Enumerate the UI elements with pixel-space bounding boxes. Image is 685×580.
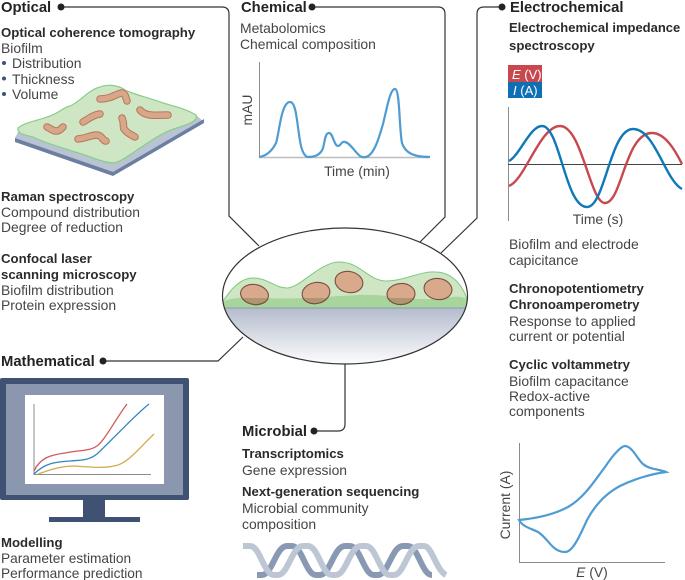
panel: chemical	[239, 0, 430, 179]
connector: chemical	[312, 7, 445, 242]
panel: mathematical	[0, 354, 189, 580]
text: chronopotentiometry: Response to applied	[509, 313, 636, 329]
text: raman spectroscopy	[1, 189, 140, 235]
text: next-generation sequencing: Microbial community	[242, 500, 369, 516]
text: impedance spectroscopy: spectroscopy	[509, 38, 595, 53]
heading: optical: Optical	[1, 0, 51, 16]
text: transcriptomics	[242, 446, 347, 478]
text: confocal microscopy: Protein expression	[1, 297, 116, 313]
text: next-generation sequencing: composition	[242, 516, 316, 532]
text: cyclic voltammetry: Biofilm capacitance	[509, 373, 629, 389]
chart: chromatogram: mAU	[239, 95, 255, 125]
legend: E and I	[508, 65, 542, 98]
text: confocal microscopy: scanning microscopy	[1, 267, 137, 282]
icon: monitor with chart	[0, 378, 189, 522]
text: optical coherence tomography: Biofilm	[1, 40, 43, 56]
text: chemical methods	[240, 20, 376, 52]
text: chronopotentiometry: Chronopotentiometry	[509, 281, 644, 296]
heading: electrochemical: Electrochemical	[510, 0, 624, 16]
connector: optical	[61, 7, 259, 246]
text: next-generation sequencing: Next-generation sequencing	[242, 484, 419, 499]
text: cyclic voltammetry: components	[509, 403, 585, 419]
text: confocal microscopy	[1, 251, 137, 313]
text: biofilm and electrode: Biofilm and electrode	[509, 236, 639, 252]
heading: chemical: Chemical	[241, 0, 307, 16]
icon: biofilm on slab	[15, 85, 204, 176]
icon: DNA helix	[243, 546, 446, 575]
chart: impedance waves	[508, 107, 682, 227]
heading: mathematical: Mathematical	[1, 354, 95, 370]
text: raman spectroscopy: Raman spectroscopy	[1, 189, 135, 204]
panel: optical	[1, 0, 204, 313]
text: optical coherence tomography: Volume	[12, 86, 59, 102]
text: confocal microscopy: Biofilm distribution	[1, 282, 114, 298]
chart: cyclic voltammogram: E (V)	[576, 564, 608, 580]
text: modelling: Modelling	[1, 535, 63, 550]
text: optical coherence tomography: Thickness	[12, 71, 75, 87]
chart: impedance waves: Time (s)	[573, 211, 623, 227]
text: chronopotentiometry: current or potential	[509, 328, 625, 344]
chart: chromatogram: Time (min)	[324, 163, 390, 179]
text: next-generation sequencing	[242, 484, 419, 532]
text: chemical methods: Metabolomics	[240, 20, 326, 36]
connector: microbial	[314, 364, 345, 431]
text: confocal microscopy: Confocal laser	[1, 251, 92, 266]
chart: cyclic voltammogram: Current (A)	[497, 471, 513, 539]
bacteria cells	[239, 269, 453, 307]
legend: E and I: E (V)	[512, 67, 542, 82]
text: modelling: Parameter estimation	[1, 551, 131, 566]
text: biofilm and electrode: capicitance	[509, 252, 579, 268]
text: chronopotentiometry: Chronoamperometry	[509, 297, 640, 312]
connector: mathematical	[103, 337, 243, 361]
illustration: biofilm lens	[220, 228, 470, 366]
text: raman spectroscopy: Compound distribution	[1, 204, 140, 220]
text: transcriptomics: Transcriptomics	[242, 446, 344, 461]
text: cyclic voltammetry: Cyclic voltammetry	[509, 357, 631, 372]
text: optical coherence tomography	[1, 25, 196, 102]
text: transcriptomics: Gene expression	[242, 462, 347, 478]
text: optical coherence tomography: Distribution	[12, 55, 81, 71]
legend: E and I: I (A)	[513, 83, 538, 98]
text: cyclic voltammetry: Redox-active	[509, 388, 590, 404]
text: biofilm and electrode	[509, 236, 639, 268]
panel: microbial	[242, 424, 446, 575]
text: impedance spectroscopy: Electrochemical impedance	[509, 20, 680, 35]
chart: chromatogram	[239, 62, 430, 179]
text: raman spectroscopy: Degree of reduction	[1, 219, 123, 235]
text: impedance spectroscopy	[509, 20, 680, 53]
text: optical coherence tomography: Optical coherence tomography	[1, 25, 196, 40]
panel: electrochemical	[497, 0, 682, 580]
text: chronopotentiometry	[509, 281, 644, 344]
text: cyclic voltammetry	[509, 357, 631, 419]
text: chemical methods: Chemical composition	[240, 36, 376, 52]
text: modelling	[1, 535, 143, 580]
chart: cyclic voltammogram	[497, 443, 666, 580]
connector: electrochemical	[441, 7, 502, 253]
heading: microbial: Microbial	[242, 424, 307, 440]
